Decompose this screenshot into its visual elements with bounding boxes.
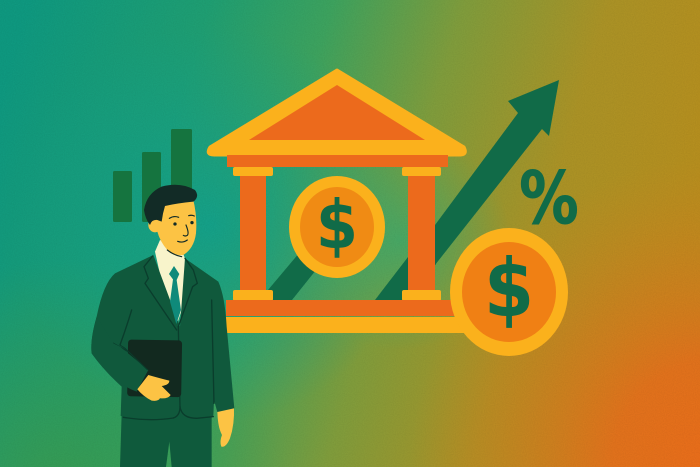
neck and shirt <box>155 240 185 325</box>
facial features <box>167 215 194 257</box>
large coin <box>450 228 568 356</box>
ear <box>148 218 162 232</box>
center coin: $ <box>316 187 358 265</box>
tablet <box>127 340 182 397</box>
rising arrow <box>268 80 559 300</box>
trousers <box>120 413 212 467</box>
sleeve <box>91 317 148 392</box>
left hand <box>137 375 171 401</box>
businessman <box>91 185 234 467</box>
left column <box>233 167 273 301</box>
tie <box>169 266 181 324</box>
bar chart icon <box>113 129 192 222</box>
base plinth <box>226 317 476 333</box>
hair <box>144 185 197 225</box>
percent sign: % <box>519 156 579 240</box>
center coin <box>289 176 385 278</box>
face <box>157 200 196 255</box>
large coin: $ <box>484 241 534 335</box>
pediment <box>249 85 425 140</box>
base step <box>226 300 456 316</box>
lapels and seams <box>113 256 214 420</box>
right hand <box>217 407 234 447</box>
right column <box>402 167 441 301</box>
entablature <box>227 155 448 167</box>
bank building <box>208 70 476 333</box>
roof <box>208 70 465 155</box>
jacket <box>91 255 234 419</box>
